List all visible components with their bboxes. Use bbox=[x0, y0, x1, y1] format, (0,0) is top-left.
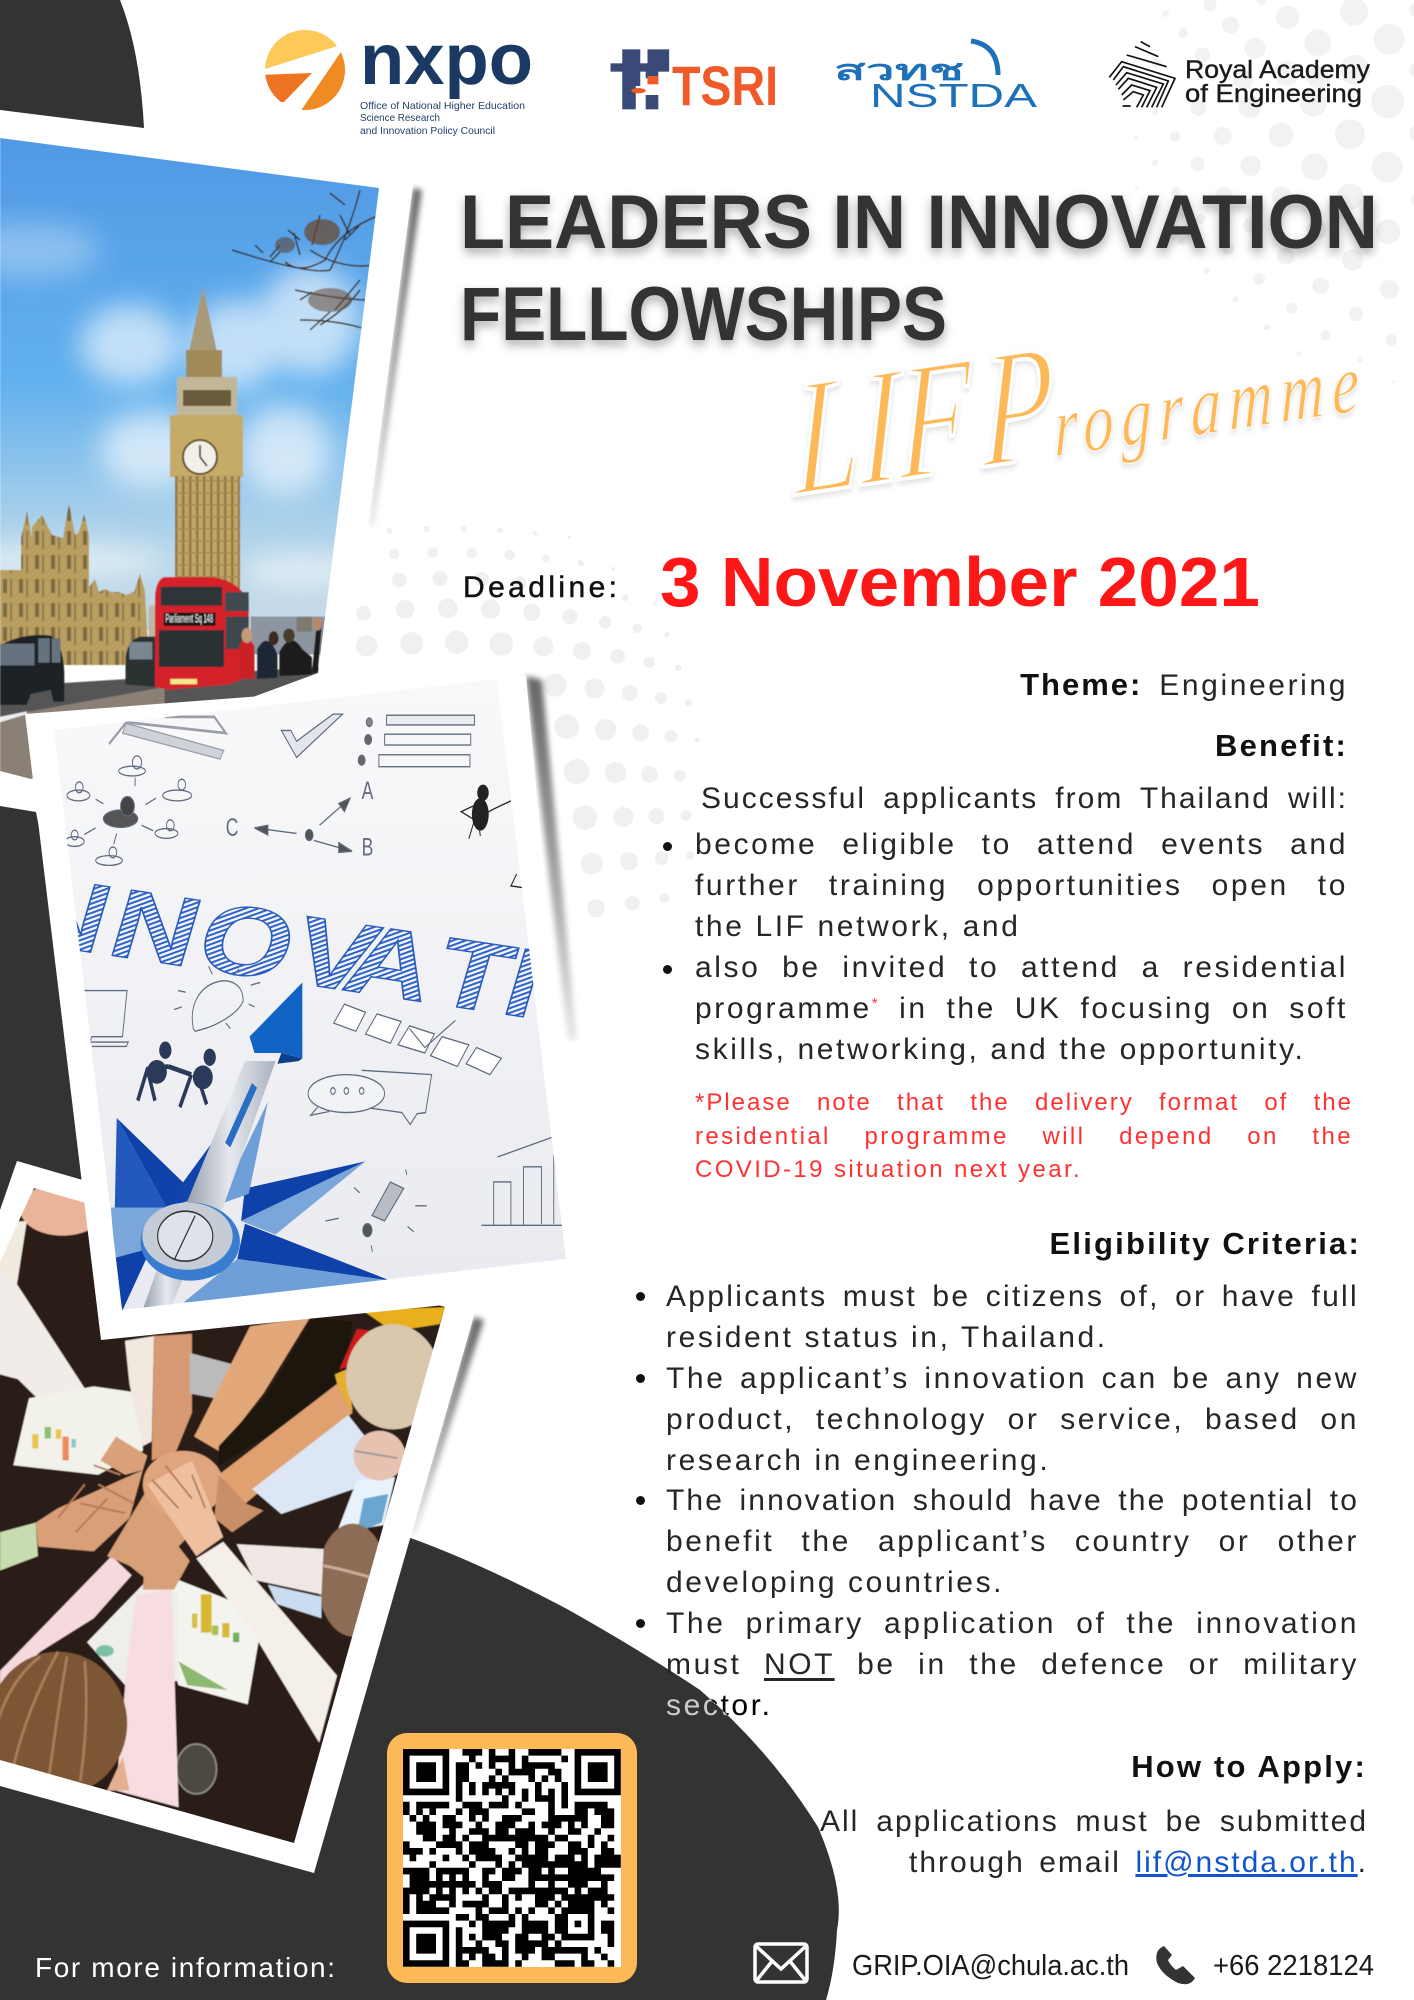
dark shape: bottom curve bbox=[0, 1537, 839, 2000]
theme: Theme: Engineering bbox=[1020, 667, 1348, 702]
eligibility list: developing countries. bbox=[666, 1566, 1004, 1599]
logo: TSRI: TSRI bbox=[672, 54, 778, 117]
hatched word: NNOVATIO bbox=[8, 856, 645, 1052]
logo: NXPO: Science Research bbox=[360, 112, 440, 124]
logo: Royal Academy of Engineering bbox=[1109, 42, 1371, 108]
tower bbox=[170, 287, 243, 594]
how to apply heading: How to Apply: bbox=[1131, 1749, 1367, 1784]
logo: NSTDA: NSTDA bbox=[870, 77, 1037, 114]
how to apply text: through email lif@nstda.or.th. bbox=[909, 1846, 1368, 1879]
shadow: team photo frame bbox=[409, 1317, 484, 1535]
dark shape: left side bbox=[0, 806, 110, 1250]
benefit heading: Benefit: bbox=[1215, 728, 1348, 763]
footer phone: +66 2218124 bbox=[1213, 1950, 1374, 1982]
eligibility list: must NOT be in the defence or military bbox=[666, 1648, 1359, 1681]
photo: innovation sketch with compass: B bbox=[362, 833, 373, 861]
shadow: big ben frame bbox=[369, 188, 422, 525]
logo: NXPO: and Innovation Policy Council bbox=[360, 125, 495, 137]
red note bbox=[695, 1089, 1353, 1183]
icon: envelope bbox=[755, 1944, 807, 1982]
logo: NXPO bbox=[265, 30, 530, 136]
title bbox=[460, 180, 1378, 357]
eligibility list: The primary application of the innovation bbox=[666, 1607, 1359, 1640]
photo: innovation sketch with compass bbox=[58, 714, 566, 1310]
logo: NSTDA bbox=[834, 41, 1037, 114]
photo: team hands together bbox=[0, 1183, 460, 1857]
eligibility heading: Eligibility Criteria: bbox=[1050, 1226, 1361, 1261]
logo: Royal Academy of Engineering: Royal Academy bbox=[1185, 56, 1371, 84]
frame: innovation photo bbox=[25, 676, 582, 1340]
benefit list: also be invited to attend a residential bbox=[695, 951, 1348, 984]
logo: Royal Academy of Engineering: of Engineering bbox=[1185, 80, 1362, 108]
photo: innovation sketch with compass: A bbox=[362, 776, 374, 805]
benefit list: become eligible to attend events and bbox=[695, 828, 1348, 861]
eligibility list: benefit the applicant’s country or other bbox=[666, 1525, 1359, 1558]
deadline date: 3 November 2021 bbox=[660, 543, 1260, 621]
eligibility list: sector. bbox=[666, 1689, 773, 1722]
eligibility list: The applicant’s innovation can be any new bbox=[666, 1362, 1359, 1395]
how to apply text: All applications must be submitted bbox=[820, 1805, 1368, 1838]
logo: TSRI bbox=[611, 49, 778, 117]
eligibility list: research in engineering. bbox=[666, 1444, 1050, 1477]
frame: team photo bbox=[0, 1161, 480, 1873]
footer label: For more information: bbox=[35, 1952, 335, 1983]
how to apply text bbox=[820, 1805, 1368, 1879]
logo: NXPO: nxpo bbox=[360, 20, 533, 100]
photo: Big Ben and Parliament: Parliament Sq 148 bbox=[165, 613, 213, 626]
icon: phone bbox=[1156, 1946, 1195, 1984]
benefit list bbox=[663, 828, 1348, 1066]
red note: *Please note that the delivery format of the bbox=[695, 1089, 1353, 1116]
eligibility list bbox=[636, 1280, 1359, 1722]
benefit intro: Successful applicants from Thailand will: bbox=[701, 782, 1348, 815]
subtitle: LIF Programme: LIFProgramme bbox=[792, 262, 1367, 532]
eligibility list: product, technology or service, based on bbox=[666, 1403, 1359, 1436]
eligibility list: Applicants must be citizens of, or have full bbox=[666, 1280, 1359, 1313]
logo: NXPO: Office of National Higher Education bbox=[360, 100, 525, 112]
title: LEADERS IN INNOVATION bbox=[460, 180, 1378, 265]
shadow: innovation frame bbox=[526, 676, 577, 1040]
deadline label: Deadline: bbox=[463, 571, 617, 604]
eligibility list: The innovation should have the potential to bbox=[666, 1484, 1359, 1517]
parliament, road, vehicles bbox=[0, 570, 22, 644]
eligibility list: resident status in, Thailand. bbox=[666, 1321, 1108, 1354]
benefit list: further training opportunities open to bbox=[695, 869, 1348, 902]
frame: big ben photo bbox=[0, 110, 415, 806]
photo: innovation sketch with compass: C bbox=[226, 813, 239, 842]
title: FELLOWSHIPS bbox=[460, 272, 947, 357]
background dots: top right bbox=[1134, 0, 1414, 384]
footer email: GRIP.OIA@chula.ac.th bbox=[852, 1950, 1129, 1982]
photo: Big Ben and Parliament bbox=[0, 130, 400, 782]
background dots: middle bbox=[356, 526, 700, 917]
logo: NSTDA: สวทช bbox=[834, 55, 964, 87]
tree branches bbox=[232, 190, 380, 330]
dark shape: top left corner bbox=[0, 0, 144, 128]
benefit list: skills, networking, and the opportunity. bbox=[695, 1033, 1305, 1066]
QR code bbox=[387, 1733, 637, 1983]
red note: residential programme will depend on the bbox=[695, 1123, 1353, 1150]
red note: COVID-19 situation next year. bbox=[695, 1156, 1082, 1183]
benefit list: programme* in the UK focusing on soft bbox=[695, 992, 1348, 1025]
benefit list: the LIF network, and bbox=[695, 910, 1020, 943]
